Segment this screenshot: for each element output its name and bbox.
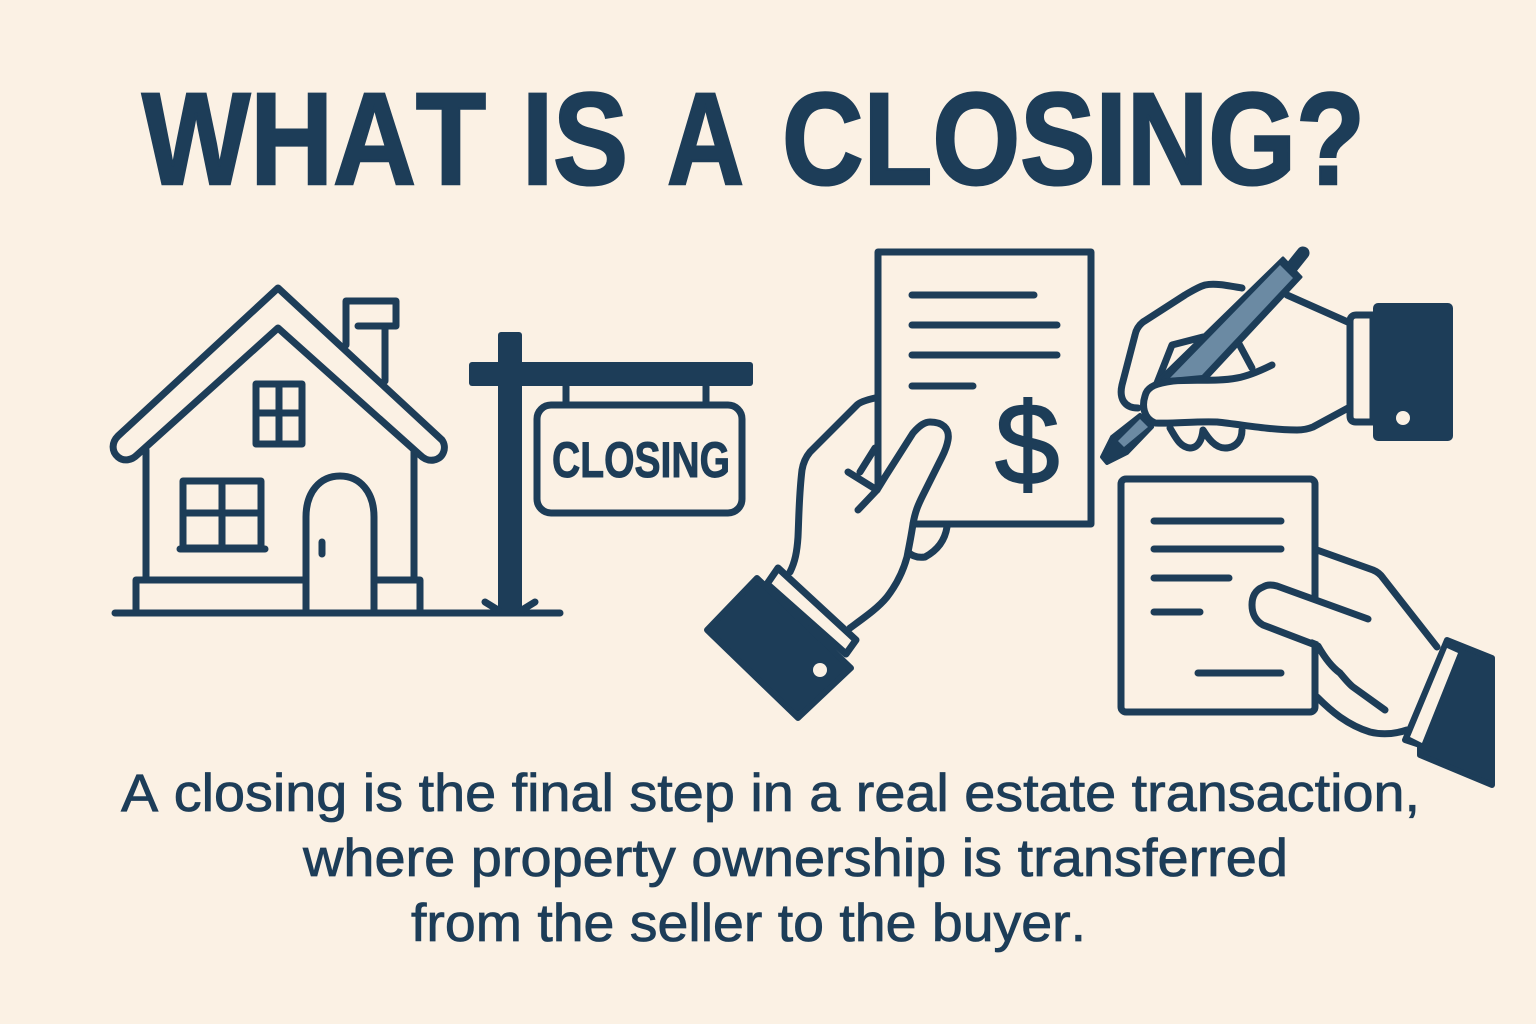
- sign label: CLOSING: [552, 432, 730, 488]
- description line 3: from the seller to the buyer.: [411, 894, 1086, 953]
- icon: hand holding second document: [1121, 479, 1492, 785]
- icon: hand signing with pen: [1102, 253, 1453, 463]
- description text: [121, 764, 1420, 953]
- title: WHAT: [142, 65, 486, 212]
- title: A: [667, 65, 744, 212]
- pen: [1102, 415, 1152, 463]
- description line 2: where property ownership is transferred: [302, 829, 1288, 888]
- icon: hand holding dollar document: [707, 252, 1091, 718]
- title: [142, 65, 1365, 212]
- icon: closing sign: [469, 332, 753, 612]
- description line 1: A closing is the final step in a real estate transaction,: [121, 764, 1420, 823]
- icon: house: [113, 288, 560, 613]
- title: CLOSING?: [782, 65, 1365, 212]
- dollar sign: $: [995, 379, 1060, 509]
- title: IS: [522, 65, 628, 212]
